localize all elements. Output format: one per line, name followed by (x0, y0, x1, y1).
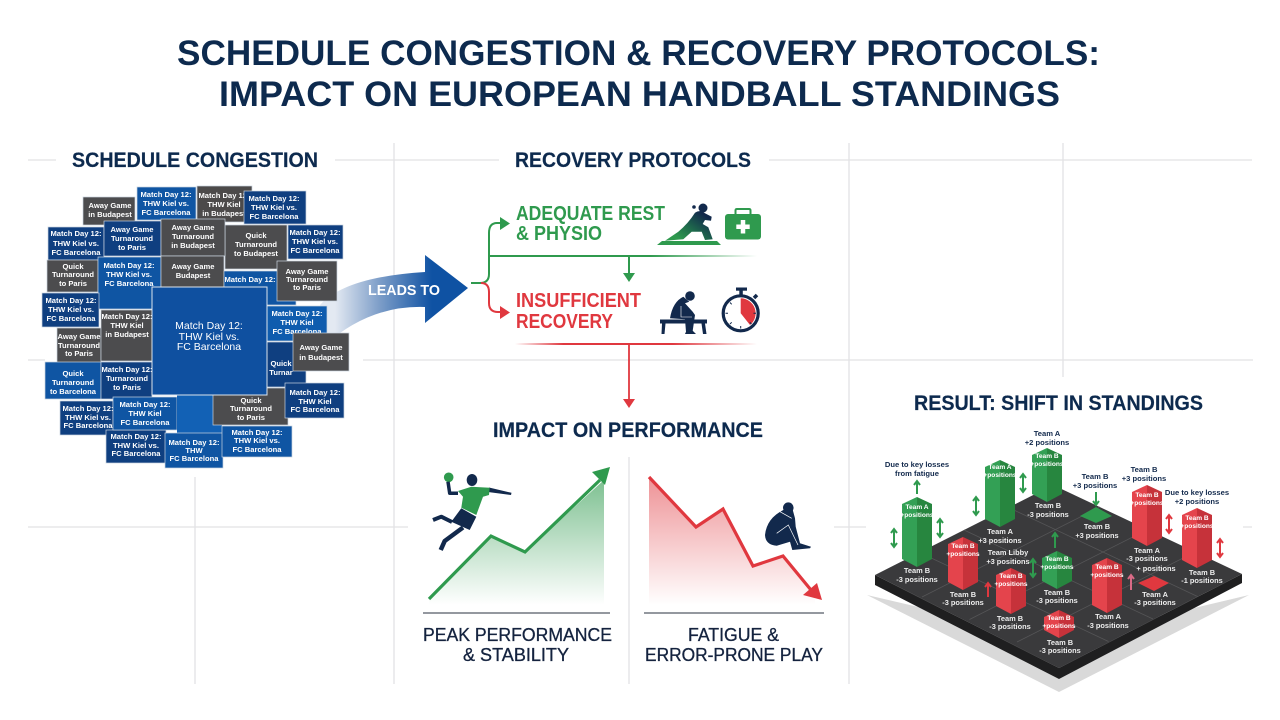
labels: on the board: Team A (1134, 546, 1161, 555)
tile: match day (98, 257, 161, 309)
labels: on the board: +3 positions (978, 536, 1022, 545)
tile: away game paris (57, 328, 101, 366)
divider: red with down arrow (515, 344, 757, 408)
tile: match day: THW Kiel (280, 318, 314, 327)
tile: away game budapest: in Budapest (88, 210, 132, 219)
tile: away game paris: Away Game (286, 267, 328, 276)
bar: team A green: +positions (1030, 461, 1064, 468)
bar: team A left green (900, 497, 934, 567)
tile: away game paris: Away Game (58, 332, 100, 341)
labels: on the board (896, 501, 1223, 655)
labels: above the board: Team B (1082, 472, 1109, 481)
caption: fatigue: FATIGUE & (688, 625, 779, 645)
tile: match day paris: to Paris (113, 383, 141, 392)
tile: quick turnaround barcelona: to Barcelona (50, 387, 97, 396)
caption: peak performance: PEAK PERFORMANCE (423, 625, 612, 645)
tile: match day: Match Day 12: (50, 229, 102, 238)
bar: team A left green: +positions (900, 512, 934, 519)
tile: match day partial (224, 271, 296, 305)
arrows: green movement (891, 474, 1099, 577)
labels: on the board: Team B (997, 614, 1023, 623)
tile: quick turnaround paris (213, 388, 288, 425)
labels: on the board: Team B (1084, 522, 1110, 531)
label: insufficient recovery: INSUFFICIENT (516, 290, 641, 312)
icon: crouching fatigued figure (765, 502, 811, 550)
tile: match day budapest: Match Day 12: (198, 191, 250, 200)
tile: away game paris: Away Game (111, 225, 153, 234)
bar: team B small red: +positions (1042, 623, 1076, 630)
board base (875, 485, 1242, 679)
bar: team B red center (994, 568, 1028, 614)
tile: match day (288, 225, 343, 259)
label: insufficient recovery (516, 290, 641, 333)
tile: match day budapest (197, 186, 252, 222)
tile: match day: Match Day 12: (289, 228, 341, 237)
tile: away game budapest (161, 219, 225, 256)
arrow: leads to (320, 255, 468, 345)
labels: on the board: Team B (1189, 568, 1215, 577)
board shadow (867, 595, 1249, 692)
bar: team B green center: Team B (1045, 556, 1069, 563)
tile: quick turnaround barcelona (45, 362, 101, 399)
bar: team B red left (946, 537, 980, 590)
flat marker: green (1080, 507, 1112, 523)
tile: match day paris: Turnaround (106, 374, 148, 383)
labels: above the board: Team B (1131, 465, 1158, 474)
tile: match day (137, 187, 196, 220)
tile: match day partial: Match Day 12: (224, 275, 276, 284)
tile: match day (244, 191, 306, 224)
tile: quick turnaround budapest (225, 225, 287, 269)
tile: away game paris (104, 221, 161, 256)
labels: above the board: +2 positions (1025, 438, 1069, 447)
bar: team A tall green (983, 460, 1017, 527)
bar: team A green: Team B (1035, 453, 1059, 460)
tile: match day: THW Kiel vs. (234, 436, 280, 445)
labels: on the board: + positions (1136, 564, 1176, 573)
tile: away game paris: Turnaround (111, 234, 153, 243)
bar: team B small red (1042, 610, 1076, 638)
tile: away game budapest (293, 333, 349, 371)
bar: team A green (1030, 448, 1064, 502)
tile: away game budapest: Away Game (300, 343, 342, 352)
tile: away game paris: Turnaround (58, 341, 100, 350)
tile: match day budapest (101, 310, 153, 361)
tile: match day: THW Kiel vs. (292, 237, 338, 246)
title: IMPACT ON EUROPEAN HANDBALL STANDINGS (219, 75, 1060, 114)
tile: quick turnaround barcelona: Turnaround (52, 378, 94, 387)
tile: match day: Match Day 12: (62, 404, 114, 413)
bar: team B red: +positions (1130, 500, 1164, 507)
tile: match day (285, 383, 344, 418)
tile: match day: THW (185, 446, 203, 455)
bar: team B red center: +positions (994, 581, 1028, 588)
tile: match day budapest: in Budapest (105, 330, 149, 339)
tile: match day budapest: Match Day 12: (101, 312, 153, 321)
connector: branch to insufficient recovery (481, 283, 510, 319)
icon: stretching athlete (657, 204, 721, 245)
icon: stopwatch (723, 288, 758, 331)
labels: on the board: -3 positions (1134, 598, 1176, 607)
labels: on the board: -3 positions (989, 622, 1031, 631)
labels: above the board: Team A (1034, 429, 1061, 438)
tile: featured match day: Match Day 12: (175, 320, 243, 332)
caption: fatigue (645, 625, 823, 665)
bar: team B green center: +positions (1040, 564, 1074, 571)
tile: match day: Match Day 12: (289, 388, 341, 397)
labels: on the board: -3 positions (1036, 596, 1078, 605)
tile: match day: FC Barcelona (273, 327, 322, 336)
tile: away game budapest: in Budapest (171, 241, 215, 250)
divider: green with down arrow (490, 256, 757, 282)
title (177, 34, 1100, 114)
tile: quick turnaround paris: Quick (240, 396, 262, 405)
tile: match day (113, 397, 177, 430)
tile: match day: Match Day 12: (271, 309, 323, 318)
tile: quick turnaround budapest: Quick (245, 231, 267, 240)
bar: team A tall green: Team A (988, 464, 1012, 471)
tile: match day: THW Kiel vs. (106, 270, 152, 279)
heading: result: RESULT: SHIFT IN STANDINGS (914, 392, 1203, 415)
title: SCHEDULE CONGESTION & RECOVERY PROTOCOLS: (177, 34, 1100, 73)
tile: match day: Match Day 12: (45, 296, 97, 305)
label: adequate rest and physio: & PHYSIO (516, 223, 602, 245)
tile: match day: THW Kiel vs. (251, 203, 297, 212)
labels: above the board: +3 positions (1073, 481, 1117, 490)
bar: team B small red: Team B (1047, 615, 1071, 622)
tile: match day: THW Kiel (128, 409, 162, 418)
labels: on the board: Team A (1142, 590, 1169, 599)
tile: match day (106, 430, 166, 463)
bar: team B right red: Team B (1185, 515, 1209, 522)
heading: schedule congestion: SCHEDULE CONGESTION (72, 149, 318, 172)
tile: match day budapest: THW Kiel (110, 321, 144, 330)
labels: on the board: Team B (950, 590, 976, 599)
tile: away game paris: Turnaround (286, 275, 328, 284)
labels: on the board: -3 positions (1027, 510, 1069, 519)
labels: on the board: Team Libby (988, 548, 1029, 557)
icon: jumping handball player (433, 472, 512, 550)
tile: match day: Match Day 12: (103, 261, 155, 270)
tile: match day (42, 293, 99, 327)
tile: featured match day (152, 287, 267, 395)
tile: match day: FC Barcelona (142, 208, 191, 217)
bar: team A tall green: +positions (983, 472, 1017, 479)
tile: away game: Away Game (172, 262, 214, 271)
tile: match day: FC Barcelona (112, 449, 161, 458)
tile: match day (267, 306, 327, 341)
tile: match day: Match Day 12: (248, 194, 300, 203)
icon: seated exhausted athlete (660, 291, 707, 334)
bar: team B right red (1180, 508, 1214, 568)
labels: on the board: -3 positions (942, 598, 984, 607)
tile: match day: FC Barcelona (52, 248, 101, 257)
bar: team B red left: +positions (946, 551, 980, 558)
chart: falling performance (644, 477, 824, 613)
labels: above the board: +3 positions (1122, 474, 1166, 483)
tile: away game paris: to Paris (293, 283, 321, 292)
bar: team B green center (1040, 551, 1074, 589)
arrow: leads to: LEADS TO (368, 282, 440, 299)
tile: match day: Match Day 12: (110, 432, 162, 441)
labels: above the board: from fatigue (895, 469, 939, 478)
labels: on the board: Team A (987, 527, 1014, 536)
tile: away game budapest: Away Game (89, 201, 131, 210)
caption: peak performance: & STABILITY (463, 645, 569, 665)
labels: above the board: Due to key losses (885, 460, 949, 469)
labels: above the board (885, 429, 1229, 506)
tile: match day paris (101, 362, 153, 399)
tile: match day (48, 227, 104, 260)
bar: team B right red: +positions (1180, 523, 1214, 530)
tile: match day: FC Barcelona (250, 212, 299, 221)
labels: on the board: Team B (1044, 588, 1070, 597)
tile: quick turnaround paris: to Paris (237, 413, 265, 422)
tile: away game paris: to Paris (65, 349, 93, 358)
tile: match day: FC Barcelona (47, 314, 96, 323)
labels: on the board: -3 positions (896, 575, 938, 584)
label: insufficient recovery: RECOVERY (516, 311, 614, 333)
tile: quick turnaround barcelona: Quick (62, 369, 84, 378)
labels: above the board: +2 positions (1175, 497, 1219, 506)
tile: featured match day: THW Kiel vs. (179, 331, 239, 343)
tile: match day (60, 401, 114, 435)
tile: away game budapest (83, 197, 135, 225)
tile: away game budapest: Turnaround (172, 232, 214, 241)
bar: team B red left: Team B (951, 543, 975, 550)
tile: away game paris: to Paris (118, 243, 146, 252)
bar: team A left green: Team A (905, 504, 929, 511)
chart: isometric standings board (867, 429, 1249, 692)
tile: match day: FC Barcelona (105, 279, 154, 288)
tile: away game paris (277, 261, 337, 301)
tile: match day: THW Kiel vs. (113, 441, 159, 450)
bar: team B red (1130, 485, 1164, 546)
arrows: red movement (985, 515, 1223, 597)
tile: match day: FC Barcelona (64, 421, 113, 430)
tile: away game (161, 256, 224, 287)
tile: quick partial (267, 342, 306, 387)
caption: peak performance (423, 625, 612, 665)
tile: blank blue (177, 395, 222, 433)
tile: match day: THW Kiel vs. (53, 239, 99, 248)
tile: quick turnaround paris: to Paris (59, 279, 87, 288)
tile: match day: FC Barcelona (291, 405, 340, 414)
tile: match day: THW Kiel vs. (143, 199, 189, 208)
tile: match day: FC Barcelona (170, 454, 219, 463)
labels: on the board: +3 positions (986, 557, 1030, 566)
connector: branch to adequate rest (471, 217, 510, 283)
tile: match day: FC Barcelona (233, 445, 282, 454)
labels: on the board: -3 positions (1039, 646, 1081, 655)
tile: quick turnaround budapest: to Budapest (234, 249, 278, 258)
bar: team B red: Team B (1135, 492, 1159, 499)
tile: quick turnaround paris (47, 260, 98, 292)
tile: featured match day: FC Barcelona (177, 341, 241, 353)
flat marker: red (1138, 576, 1169, 591)
tile: match day: Match Day 12: (231, 428, 283, 437)
tile: quick turnaround paris: Turnaround (52, 270, 94, 279)
tile: match day: Match Day 12: (140, 190, 192, 199)
bar: team B red right (1090, 558, 1124, 613)
labels: on the board: +3 positions (1075, 531, 1119, 540)
labels: on the board: -3 positions (1087, 621, 1129, 630)
tile: quick turnaround budapest: Turnaround (235, 240, 277, 249)
tile: match day: FC Barcelona (291, 246, 340, 255)
tile: match day paris: Match Day 12: (101, 365, 153, 374)
tile: quick partial: Quick (270, 359, 292, 368)
bar: team B red center: Team B (999, 573, 1023, 580)
tile: away game: Budapest (176, 271, 211, 280)
tile: match day: FC Barcelona (121, 418, 170, 427)
tile: match day: Match Day 12: (119, 400, 171, 409)
labels: on the board: Team B (904, 566, 930, 575)
tile: match day (165, 433, 223, 468)
tile: match day: THW Kiel (298, 397, 332, 406)
heading: impact on performance: IMPACT ON PERFORMANCE (493, 419, 763, 442)
panel: calendar tile cluster (42, 186, 349, 468)
tile: away game budapest: in Budapest (299, 353, 343, 362)
bar: team B red right: Team B (1095, 564, 1119, 571)
caption: fatigue: ERROR-PRONE PLAY (645, 645, 823, 665)
bar: team B red right: +positions (1090, 572, 1124, 579)
chart: rising performance (423, 467, 610, 613)
label: adequate rest and physio (516, 203, 665, 245)
label: adequate rest and physio: ADEQUATE REST (516, 203, 665, 225)
tile: match day budapest: in Budapest (202, 209, 246, 218)
tile: quick turnaround paris: Turnaround (230, 404, 272, 413)
tile: match day budapest: THW Kiel (207, 200, 241, 209)
icon: first aid kit (725, 209, 761, 240)
tile: away game budapest: Away Game (172, 223, 214, 232)
heading: recovery protocols: RECOVERY PROTOCOLS (515, 149, 751, 172)
labels: on the board: -1 positions (1181, 576, 1223, 585)
tile: match day (222, 426, 292, 457)
tile: match day: THW Kiel vs. (65, 413, 111, 422)
labels: on the board: Team B (1047, 638, 1073, 647)
tile: match day: THW Kiel vs. (48, 305, 94, 314)
labels: above the board: Due to key losses (1165, 488, 1229, 497)
tile: match day: Match Day 12: (168, 438, 220, 447)
tile: quick partial: Turnar (269, 368, 293, 377)
labels: on the board: Team B (1035, 501, 1061, 510)
tile: quick turnaround paris: Quick (62, 262, 84, 271)
labels: on the board: Team A (1095, 612, 1122, 621)
labels: on the board: -3 positions (1126, 554, 1168, 563)
